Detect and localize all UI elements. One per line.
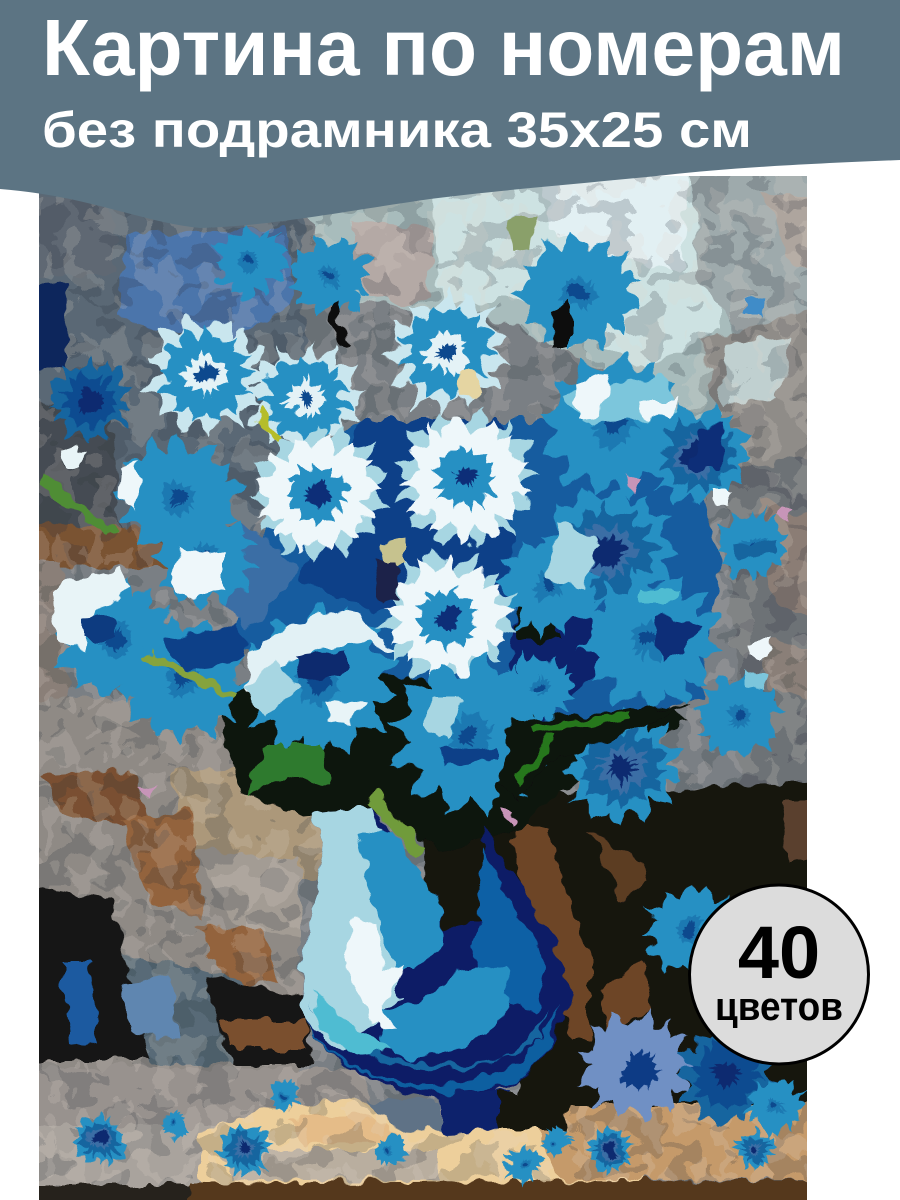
badge: 40 colours bbox=[690, 885, 868, 1064]
painting: cornflowers in a blue vase bbox=[39, 176, 807, 1200]
flowers bbox=[44, 207, 790, 978]
subtitle: без подрамника 35x25 см bbox=[42, 102, 752, 158]
paint mottling: light patches bbox=[39, 176, 807, 1186]
paint mottling: dark patches bbox=[39, 176, 807, 1187]
header banner bbox=[0, 0, 900, 228]
dark mass behind the bouquet bbox=[215, 420, 720, 850]
title: Картина по номерам bbox=[42, 3, 845, 92]
white petals and navy accents bbox=[50, 375, 775, 765]
badge: 40 colours: 40 bbox=[738, 911, 820, 994]
fallen flowers on the table bbox=[72, 995, 813, 1188]
dark shadows and brown wall bbox=[39, 281, 807, 1200]
vase bbox=[301, 805, 570, 1133]
stems and dabs bbox=[40, 215, 795, 858]
badge: 40 colours: цветов bbox=[715, 985, 843, 1029]
painting background bbox=[39, 176, 807, 1188]
